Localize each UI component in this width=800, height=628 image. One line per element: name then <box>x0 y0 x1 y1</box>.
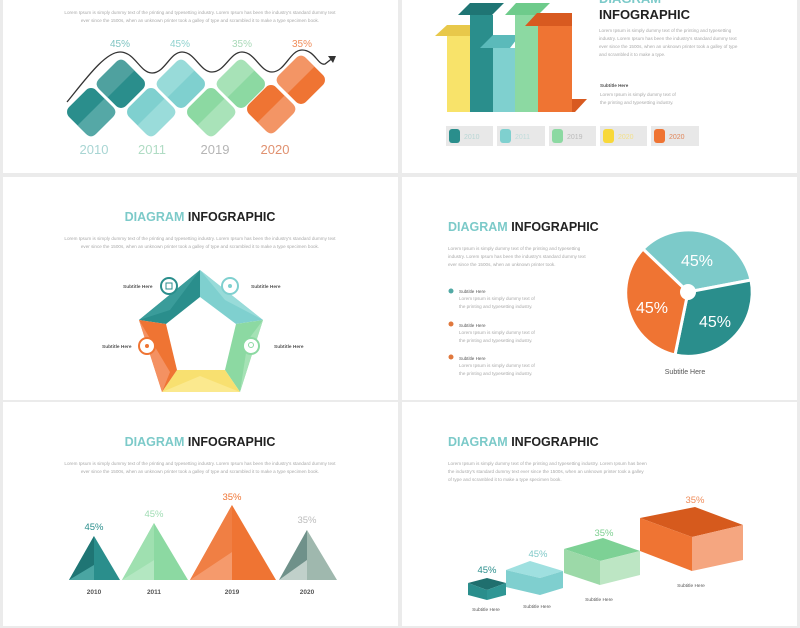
bullets <box>448 288 536 376</box>
text block <box>64 461 336 474</box>
bullets: the printing and typesetting industry. <box>459 338 532 343</box>
labels: Subtitle Here <box>102 344 132 350</box>
bullets: the printing and typesetting industry. <box>459 304 532 309</box>
labels: 35% <box>594 528 614 539</box>
chart: boxes <box>468 507 743 600</box>
subtitle block: Subtitle Here <box>600 83 629 88</box>
labels: 35% <box>222 492 242 503</box>
panel: 3D boxes: Subtitle Here <box>677 583 705 589</box>
text block: Lorem Ipsum is simply dummy text of the printing and typesetting industry. Lorem Ipsum has been the industry's standard dummy text <box>64 461 336 466</box>
text block: Lorem Ipsum is simply dummy text of the printing and typesetting industry. Lorem Ipsum has been <box>448 461 647 466</box>
chart: diamond pairs <box>64 53 328 139</box>
text block <box>448 246 586 267</box>
labels: pie <box>636 253 731 331</box>
chart: triangles <box>69 505 337 580</box>
panel: 3D boxes: Subtitle Here <box>472 607 500 613</box>
labels: 45% <box>84 522 104 533</box>
text block: ever since the 1500s, when an unknown printer took. <box>448 262 556 267</box>
text block: intro <box>64 10 336 23</box>
labels <box>477 495 705 576</box>
subtitle block: Lorem Ipsum is simply dummy text of <box>600 92 677 97</box>
panel: 3D boxes: Subtitle Here <box>523 604 551 610</box>
legend: 2019 <box>567 134 583 141</box>
labels: Subtitle Here <box>123 284 153 290</box>
chart: pentagon <box>139 270 263 392</box>
bullets: Lorem Ipsum is simply dummy text of <box>459 330 536 335</box>
legend: 2010 <box>464 134 480 141</box>
text block: and scrambled it to make a type. <box>599 52 665 57</box>
labels: percents: 35% <box>232 39 252 50</box>
text block: intro: Lorem Ipsum is simply dummy text of the printing and typesetting industry. Lorem Ipsum has been the industry's standard dummy text <box>64 10 336 15</box>
labels: percents: 45% <box>110 39 130 50</box>
panel: 3D boxes: Subtitle Here <box>585 597 613 603</box>
labels: years <box>80 142 289 157</box>
panel: triangles: 2019 <box>225 589 240 596</box>
labels: 45% <box>528 549 548 560</box>
legend: 2020 <box>618 134 634 141</box>
labels: 35% <box>685 495 705 506</box>
labels <box>84 492 317 533</box>
legend: 2020 <box>669 134 685 141</box>
labels: 45% <box>144 509 164 520</box>
panel: triangles: 2011 <box>147 589 161 596</box>
labels: 35% <box>297 515 317 526</box>
panel: pentagon <box>3 177 398 400</box>
icons <box>139 278 259 354</box>
title: DIAGRAM INFOGRAPHIC <box>125 210 275 224</box>
chart: 3D bars <box>435 3 587 112</box>
title: DIAGRAM INFOGRAPHIC <box>448 435 599 449</box>
text block: of type and scrambled it to make a type specimen book. <box>448 477 562 482</box>
text block: Lorem Ipsum is simply dummy text of the printing and typesetting industry. Lorem Ipsum has been the industry's standard dummy text <box>64 236 336 241</box>
text block: ever since the 1500s, when an unknown printer took a galley of type and scrambled it to make a type specimen book. <box>81 469 319 474</box>
legend <box>446 126 699 146</box>
text block: Lorem Ipsum is simply dummy text of the printing and typesetting <box>599 28 732 33</box>
bullets: Subtitle Here <box>459 356 486 361</box>
labels: Subtitle Here <box>274 344 304 350</box>
subtitle block: the printing and typesetting industry. <box>600 100 673 105</box>
subtitle block <box>600 83 677 105</box>
labels: 45% <box>477 565 497 576</box>
bullets: Lorem Ipsum is simply dummy text of <box>459 363 536 368</box>
bullets: Subtitle Here <box>459 289 486 294</box>
labels: years: 2010 <box>80 142 108 157</box>
labels <box>102 284 304 350</box>
text block: Lorem Ipsum is simply dummy text of the printing and typesetting <box>448 246 581 251</box>
text block: intro: ever since the 1500s, when an unknown printer took a galley of type and scrambled it to make a type specimen book. <box>81 18 319 23</box>
text block: ever since the 1500s, when an unknown printer took a galley of type and scrambled it to make a type specimen book. <box>81 244 319 249</box>
text block: the industry's standard dummy text ever since the 1500s, when an unknown printer took a galley <box>448 469 644 474</box>
title: DIAGRAM INFOGRAPHIC <box>448 220 599 234</box>
text block: industry. Lorem Ipsum has been the industry's standard dummy text <box>448 254 586 259</box>
labels: percents: 45% <box>170 39 190 50</box>
panel: triangles <box>3 402 398 626</box>
labels: years: 2019 <box>201 142 229 157</box>
labels: pie: 45% <box>699 314 731 331</box>
labels: percents <box>110 39 312 50</box>
labels: years: 2011 <box>138 142 166 157</box>
labels: percents: 35% <box>292 39 312 50</box>
panel: triangles: 2020 <box>300 589 315 596</box>
panel: 3D bars <box>402 0 797 173</box>
panel: 3D boxes <box>402 402 797 626</box>
panel: wave diamonds <box>3 0 398 173</box>
title: DIAGRAM INFOGRAPHIC <box>125 435 275 449</box>
text block <box>599 28 738 57</box>
labels: pie: 45% <box>681 253 713 270</box>
chart: pie <box>626 230 752 356</box>
panel: pie: Subtitle Here <box>665 369 705 376</box>
arrow: wave line <box>67 50 334 102</box>
panel: pie <box>402 177 797 400</box>
legend: 2011 <box>515 134 530 141</box>
text block: industry. Lorem Ipsum has been the industry's standard dummy text <box>599 36 737 41</box>
labels: years: 2020 <box>261 142 289 157</box>
text block <box>64 236 336 249</box>
text block: ever since the 1500s, when an unknown printer took a galley of type <box>599 44 738 49</box>
text block <box>448 461 647 482</box>
labels: Subtitle Here <box>251 284 281 290</box>
panel: 3D bars: INFOGRAPHIC <box>599 7 691 22</box>
panel: triangles: 2010 <box>87 589 102 596</box>
bullets: the printing and typesetting industry. <box>459 371 532 376</box>
labels: pie: 45% <box>636 300 668 317</box>
bullets: Subtitle Here <box>459 323 486 328</box>
bullets: Lorem Ipsum is simply dummy text of <box>459 296 536 301</box>
